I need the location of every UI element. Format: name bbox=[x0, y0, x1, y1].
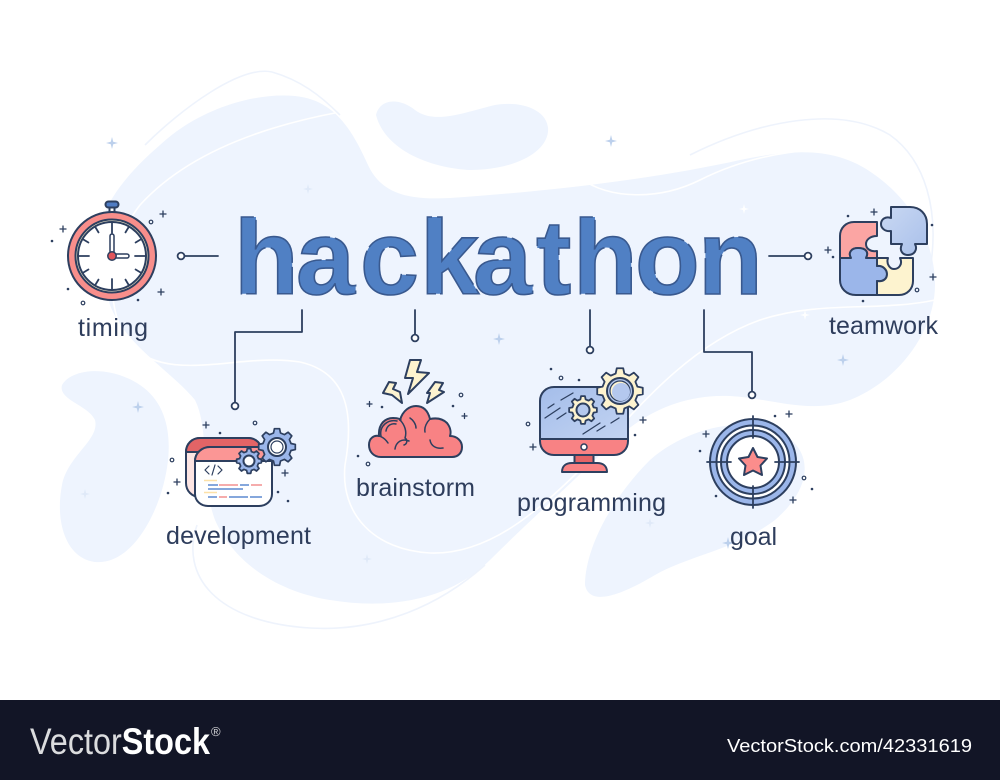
brain cloud bbox=[369, 406, 462, 457]
connector: timing bbox=[178, 253, 218, 259]
icon: target bbox=[699, 411, 813, 508]
label: goal: goal bbox=[730, 523, 777, 551]
label: development: development bbox=[166, 522, 311, 550]
lightning bolts bbox=[383, 360, 444, 403]
icon: puzzle bbox=[825, 207, 936, 302]
label: brainstorm: brainstorm bbox=[356, 474, 475, 502]
background: pale blue blobs bbox=[60, 95, 935, 604]
icon: brain with lightning bbox=[357, 360, 467, 466]
label: programming: programming bbox=[517, 489, 666, 517]
footer registered mark: ® bbox=[211, 724, 221, 739]
connector: goal bbox=[704, 310, 755, 398]
puzzle piece: cream bbox=[877, 258, 913, 295]
connector: development bbox=[232, 310, 302, 409]
background: thin contour lines bbox=[112, 71, 935, 628]
label: teamwork: teamwork bbox=[829, 312, 938, 340]
footer id: VectorStock.com/42331619 bbox=[727, 736, 972, 756]
label: timing: timing bbox=[78, 314, 148, 342]
puzzle piece: blue bbox=[840, 248, 887, 295]
puzzle piece: red bbox=[840, 222, 877, 258]
icon: monitor with gears bbox=[526, 368, 646, 472]
background: sparkles bbox=[80, 135, 849, 564]
icon: development window bbox=[167, 421, 295, 506]
footer bar bbox=[0, 700, 1000, 780]
connector: programming bbox=[587, 310, 593, 353]
puzzle piece: detached bbox=[881, 207, 927, 255]
connector: brainstorm bbox=[412, 310, 418, 341]
icon: stopwatch bbox=[51, 202, 166, 305]
footer logo: VectorStock bbox=[30, 721, 210, 762]
title: hackathon bbox=[234, 199, 763, 317]
connector: teamwork bbox=[769, 253, 811, 259]
